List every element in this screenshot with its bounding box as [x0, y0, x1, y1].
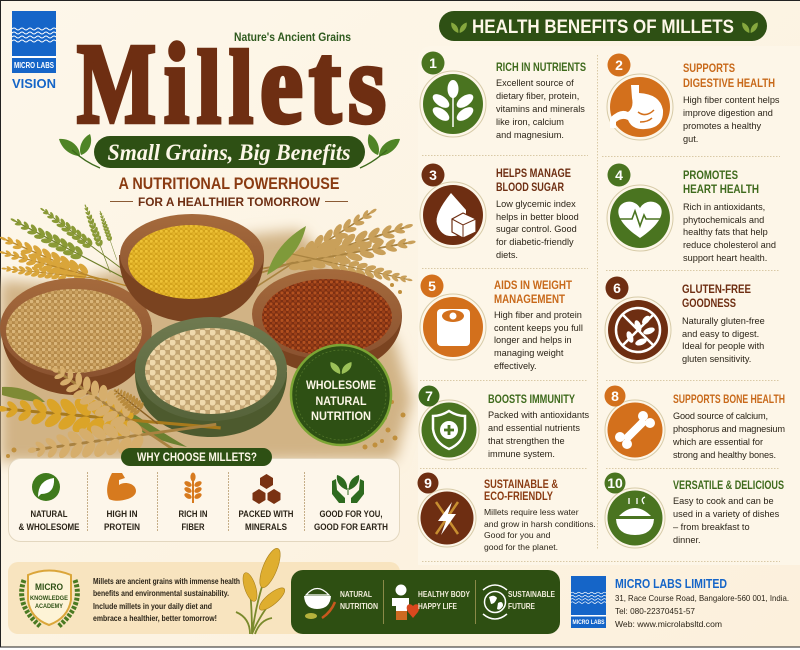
emblem: shield and laurel: MICRO [35, 582, 63, 592]
contact details: Tel: 080-22370451-57 [615, 606, 695, 616]
body: diets. [496, 250, 518, 260]
title: Millets [77, 20, 386, 147]
title: SUPPORTS [683, 61, 735, 75]
emblem: shield and laurel: ACADEMY [35, 603, 64, 610]
badge number [608, 164, 630, 186]
body: Good source of calcium, [673, 411, 768, 421]
title: GOODNESS [682, 296, 736, 310]
title: Millets: e [260, 20, 303, 147]
bowl: tan millet [0, 278, 152, 395]
labels: RICH IN [178, 509, 208, 520]
title: SUSTAINABLE & [484, 477, 558, 491]
illustration: wheat plant [236, 546, 288, 634]
body [496, 78, 585, 140]
labels: NATURAL [30, 509, 68, 520]
title [494, 278, 573, 306]
labels: PROTEIN [104, 522, 140, 533]
heading: health benefits of millets [439, 11, 767, 41]
labels: MINERALS [245, 522, 287, 533]
body: strong and healthy bones. [673, 450, 776, 460]
labels: HIGH IN [106, 509, 138, 520]
body [488, 410, 590, 459]
emblem: shield and laurel [22, 570, 77, 626]
logo: Micro Labs Vision: VISION [12, 76, 56, 91]
body: support heart health. [683, 253, 767, 263]
logo: Micro Labs Vision: MICRO LABS [14, 61, 55, 70]
body: Millets require less water [484, 507, 579, 517]
badge number [608, 54, 630, 76]
title [484, 477, 558, 503]
body [683, 95, 780, 144]
icon: shield [419, 400, 479, 460]
benefit 9: sustainable and eco-friendly [418, 472, 596, 552]
icon: flexed arm [107, 473, 136, 501]
wheat: right stalks [211, 200, 418, 312]
badge number: 4 [615, 167, 623, 183]
icon: heart with pulse [607, 185, 673, 251]
contact details: 31, Race Course Road, Bangalore-560 001, India. [615, 593, 789, 603]
badge: wholesome natural nutrition: NUTRITION [311, 411, 371, 423]
panel: why choose millets [8, 448, 400, 542]
title: Millets: l [197, 30, 221, 145]
body: like iron, calcium [496, 117, 564, 127]
icon: steaming bowl [605, 488, 665, 548]
badge number [422, 52, 444, 74]
badge number [418, 472, 438, 494]
benefit 2: supports digestive health [607, 54, 780, 144]
body: phosphorus and magnesium [673, 424, 785, 434]
badge number [418, 386, 440, 406]
academy text: benefits and environmental sustainability. [93, 589, 229, 598]
title: Millets: M [77, 20, 156, 147]
body: effectively. [494, 361, 537, 371]
bowl: red millet [252, 269, 402, 373]
body [496, 199, 579, 260]
body: High fiber and protein [494, 310, 582, 320]
body [494, 310, 583, 371]
logo: Micro Labs Vision [12, 11, 56, 91]
title: Millets: l [229, 30, 253, 145]
icon: stomach [607, 74, 673, 140]
panel: green pillars strip [291, 570, 560, 634]
body: good for the planet. [484, 542, 558, 552]
body: Rich in antioxidants, [683, 202, 765, 212]
badge: wholesome natural nutrition: NATURAL [316, 396, 366, 408]
badge number: 7 [425, 388, 433, 404]
body: High fiber content helps [683, 95, 780, 105]
body: content keeps you full [494, 323, 583, 333]
bowl: cream millet [135, 317, 287, 437]
body: Packed with antioxidants [488, 410, 590, 420]
title [683, 61, 775, 90]
hero: bowls of millet and wheat [0, 200, 418, 470]
tagline ribbon [59, 134, 400, 168]
panel: micro knowledge academy [8, 546, 400, 634]
title: GLUTEN-FREE [682, 282, 751, 296]
body: vitamins and minerals [496, 104, 585, 114]
badge number: 2 [615, 57, 623, 73]
badge number: 3 [429, 167, 437, 183]
title: Millets: s [348, 20, 386, 147]
body: and grow in harsh conditions. [484, 519, 596, 529]
benefit 4: promotes heart health [607, 164, 776, 263]
heading: health benefits of millets: HEALTH BENEFITS OF MILLETS [472, 17, 734, 38]
icon: globe [483, 585, 507, 619]
title [683, 168, 759, 196]
eyebrow: Nature's Ancient Grains: Nature's Ancient Grains [234, 30, 351, 44]
body: and easy to digest. [682, 329, 759, 339]
icon: healthy body [392, 584, 419, 620]
badge number: 8 [611, 388, 619, 404]
icon: hands holding plant [332, 475, 364, 503]
title: ECO-FRIENDLY [484, 489, 553, 503]
wheat: upper left stalks [7, 203, 131, 287]
body: longer and helps in [494, 335, 572, 345]
benefit 6: gluten-free goodness [605, 276, 765, 364]
badge number [606, 276, 628, 300]
icon: bone [605, 400, 665, 460]
icon: lightning [418, 489, 476, 547]
body: Naturally gluten-free [682, 316, 765, 326]
body: helps in better blood [496, 212, 579, 222]
icon: weighing scale [420, 294, 486, 360]
title: PROMOTES [683, 168, 738, 182]
title: Millets: t [309, 20, 341, 147]
logo: Micro Labs footer: MICRO LABS [572, 619, 605, 626]
heading pill: WHY CHOOSE MILLETS? [137, 452, 257, 464]
contact details: MICRO LABS LIMITED [615, 576, 727, 591]
benefit 3: helps manage blood sugar [420, 164, 579, 260]
body: healthy fats that help [683, 227, 768, 237]
body [672, 411, 785, 460]
scattered grains [6, 283, 406, 458]
body: Excellent source of [496, 78, 574, 88]
body: gut. [683, 134, 698, 144]
body: Ideal for people with [682, 341, 764, 351]
body: immune system. [488, 449, 555, 459]
body [673, 496, 780, 545]
badge number: 5 [428, 278, 436, 294]
icon: plant [420, 71, 486, 137]
badge number [604, 472, 626, 494]
body: gluten sensitivity. [682, 354, 751, 364]
burlap cloth [0, 230, 412, 462]
emblem: shield and laurel: KNOWLEDGE [30, 595, 69, 602]
icon: crossed wheat [605, 297, 671, 363]
body [683, 202, 776, 263]
contact details [615, 576, 789, 629]
body: improve digestion and [683, 108, 773, 118]
badge number [420, 274, 444, 298]
icon: leaf [32, 473, 60, 501]
contact details: Web: www.microlabsltd.com [615, 619, 722, 629]
body: dinner. [673, 535, 701, 545]
labels: & WHOLESOME [18, 522, 80, 533]
body: sugar control. Good [496, 224, 577, 234]
body: which are essential for [672, 437, 763, 447]
badge number [604, 386, 626, 406]
body: phytochemicals and [683, 215, 764, 225]
body: – from breakfast to [673, 522, 750, 532]
title: RICH IN NUTRIENTS [496, 60, 586, 74]
subtitle: a nutritional powerhouse: FOR A HEALTHIER TOMORROW [138, 195, 321, 209]
natural nutrition label [340, 590, 378, 611]
badge: wholesome natural nutrition: WHOLESOME [306, 380, 376, 392]
body: that strengthen the [488, 436, 565, 446]
healthy body label [418, 590, 471, 611]
icon: wheat [183, 472, 203, 503]
icon: mineral hexagons [252, 474, 280, 504]
badge number: 6 [613, 280, 621, 296]
healthy body label: HAPPY LIFE [418, 602, 458, 611]
natural nutrition label: NATURAL [340, 590, 372, 599]
title: MANAGEMENT [494, 292, 566, 306]
heading pill [121, 448, 272, 466]
sustainable future label: SUSTAINABLE [508, 590, 556, 599]
icon: food bowl [304, 588, 335, 619]
tagline ribbon: Small Grains, Big Benefits [108, 140, 351, 165]
body: promotes a healthy [683, 121, 762, 131]
body: Good for you and [484, 530, 551, 540]
body: for diabetic-friendly [496, 237, 574, 247]
benefit 10: versatile and delicious [604, 472, 784, 548]
title: HEART HEALTH [683, 182, 759, 196]
title [496, 166, 571, 194]
title: AIDS IN WEIGHT [494, 278, 573, 292]
bowl: yellow millet [119, 214, 264, 322]
body: used in a variety of dishes [673, 509, 780, 519]
healthy body label: HEALTHY BODY [418, 590, 471, 599]
benefit 5: aids in weight management [420, 274, 583, 371]
benefit 1: rich in nutrients [420, 52, 586, 140]
badge: wholesome natural nutrition [291, 345, 391, 445]
benefit 8: supports bone health [604, 386, 785, 460]
badge number: 10 [607, 475, 623, 491]
subtitle: a nutritional powerhouse [110, 174, 348, 209]
title: BOOSTS IMMUNITY [488, 392, 575, 406]
subtitle: a nutritional powerhouse: A NUTRITIONAL POWERHOUSE [118, 174, 340, 193]
academy text [93, 577, 240, 623]
body: reduce cholesterol and [683, 240, 776, 250]
body: and essential nutrients [488, 423, 580, 433]
natural nutrition label: NUTRITION [340, 602, 378, 611]
badge number [422, 164, 444, 186]
academy text: Millets are ancient grains with immense health [93, 577, 240, 586]
body: and magnesium. [496, 130, 564, 140]
labels [18, 509, 388, 533]
title: DIGESTIVE HEALTH [683, 76, 775, 90]
title: BLOOD SUGAR [496, 180, 564, 194]
body: managing weight [494, 348, 564, 358]
academy text: Include millets in your daily diet and [93, 602, 212, 611]
title: HELPS MANAGE [496, 166, 571, 180]
benefit 7: boosts immunity [418, 386, 590, 460]
sustainable future label [508, 590, 556, 611]
body: dietary fiber, protein, [496, 91, 579, 101]
wheat: left golden stalks [0, 228, 147, 308]
body [484, 507, 596, 552]
body: Easy to cook and can be [673, 496, 774, 506]
sustainable future label: FUTURE [508, 602, 536, 611]
badge number: 1 [429, 55, 437, 71]
labels: GOOD FOR YOU, [320, 509, 382, 520]
labels: PACKED WITH [238, 509, 294, 520]
title: Millets: i [164, 20, 189, 147]
panel: benefits background [418, 46, 800, 565]
logo: Micro Labs footer [571, 576, 606, 628]
title [682, 282, 751, 310]
academy text: embrace a healthier, better tomorrow! [93, 614, 217, 623]
wheat: lower left stalks [2, 387, 45, 402]
body [682, 316, 765, 364]
labels: FIBER [182, 522, 205, 533]
body: Low glycemic index [496, 199, 576, 209]
labels: GOOD FOR EARTH [314, 522, 388, 533]
icon: drop and sugar cube [420, 182, 486, 248]
badge number: 9 [424, 475, 432, 491]
